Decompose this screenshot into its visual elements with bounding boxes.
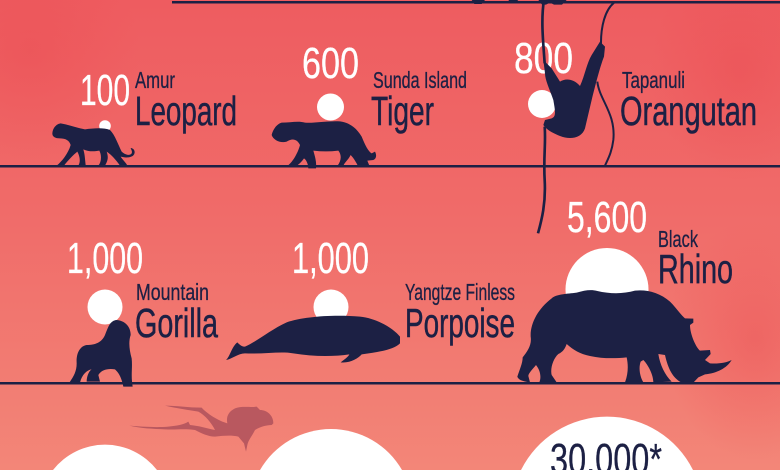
entry: Sunda Island Tiger: 600 — [302, 39, 359, 88]
entry: Mountain Gorilla: Mountain — [136, 279, 209, 305]
entry: Tapanuli Orangutan: 800 — [514, 34, 573, 83]
entry: Mountain Gorilla: Gorilla — [135, 300, 218, 346]
population circles: row 1 — [99, 90, 556, 132]
entry: Yangtze Finless Porpoise: Porpoise — [405, 300, 515, 346]
entry: Mountain Gorilla: 1,000 — [67, 234, 143, 283]
entry: Amur Leopard: Amur — [135, 67, 175, 93]
entry: Black Rhino: Rhino — [658, 246, 733, 292]
population circles: row 2 — [88, 248, 648, 331]
entry: Amur Leopard: Leopard — [135, 88, 237, 134]
population circles: row 3 — [53, 417, 693, 470]
entry: Amur Leopard: 100 — [80, 66, 130, 115]
entry: Mountain Gorilla — [67, 234, 218, 387]
entry: Sunda Island Tiger — [272, 39, 467, 168]
entry: Black Rhino: Black — [658, 226, 698, 252]
entry: Sunda Island Tiger: Tiger — [371, 88, 434, 134]
entry: Yangtze Finless Porpoise: 1,000 — [292, 234, 369, 283]
entry: Tapanuli Orangutan: Tapanuli — [622, 67, 685, 93]
vines and orangutan silhouette — [472, 0, 614, 233]
entry: Yangtze Finless Porpoise: Yangtze Finless — [405, 279, 515, 305]
entry: Tapanuli Orangutan — [472, 0, 757, 233]
entry: Yangtze Finless Porpoise — [226, 234, 515, 362]
entry: Black Rhino — [517, 193, 733, 383]
entry: Black Rhino: 5,600 — [567, 193, 647, 242]
entry: Sunda Island Tiger: Sunda Island — [373, 67, 467, 93]
entry: Amur Leopard — [52, 66, 237, 166]
icon: scuba diver — [129, 406, 273, 452]
